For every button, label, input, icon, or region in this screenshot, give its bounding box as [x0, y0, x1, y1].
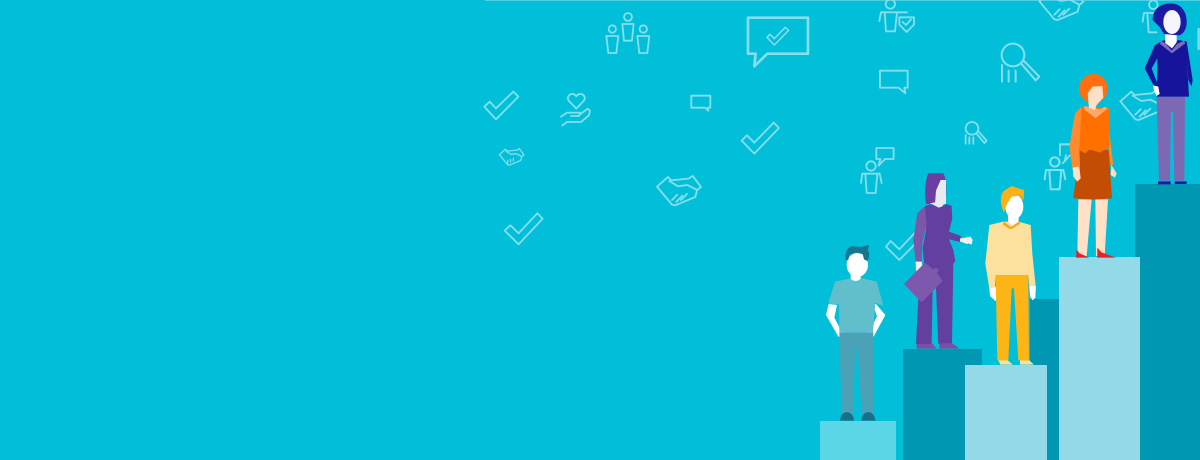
- figure: man in yellow sweater: [985, 186, 1036, 365]
- icon: shield fragment at right edge: [1195, 29, 1200, 49]
- icon: hand holding heart: [561, 94, 590, 125]
- figure: young man in teal shirt: [826, 245, 885, 421]
- figure: woman in navy sweater: [1145, 3, 1193, 184]
- figure: woman in purple suit with clipboard: [904, 173, 973, 349]
- icon: check: [505, 213, 543, 244]
- pedestal: far dark column: [1030, 299, 1060, 460]
- icon: person with speech bubble: [1045, 144, 1070, 189]
- pedestal: third light column: [965, 365, 1047, 460]
- icon: handshake: [657, 176, 701, 205]
- icon: speech bubble: [880, 71, 908, 93]
- figure: woman in orange blouse and skirt: [1069, 74, 1117, 258]
- icon: small magnifier: [966, 122, 987, 144]
- icon: check: [742, 123, 779, 154]
- icons: left cluster: [484, 13, 808, 244]
- icons: right cluster: [861, 0, 1073, 193]
- icon: magnifier with bars: [1002, 44, 1039, 82]
- icons: top right cluster: [1039, 0, 1199, 189]
- icon: check: [484, 92, 518, 119]
- icon: group of people: [606, 13, 649, 53]
- pedestal: first light column: [820, 421, 896, 460]
- icon: small speech bubble: [691, 96, 710, 111]
- pedestal: second dark column: [903, 349, 982, 460]
- pedestal: fourth light column: [1059, 257, 1140, 460]
- icon: small handshake: [499, 149, 524, 165]
- pedestal: tallest dark column: [1135, 184, 1200, 460]
- icon: person at top edge: [1143, 0, 1158, 32]
- icon: check behind second figure: [886, 233, 915, 260]
- icon: person with shield: [879, 0, 914, 32]
- icon: person with speech bubble: [1045, 144, 1073, 189]
- icon: person with speech bubble: [861, 148, 894, 193]
- icon: speech bubble with check: [748, 18, 808, 66]
- icon: handshake at top edge: [1039, 0, 1083, 20]
- icon: handshake: [1120, 91, 1164, 120]
